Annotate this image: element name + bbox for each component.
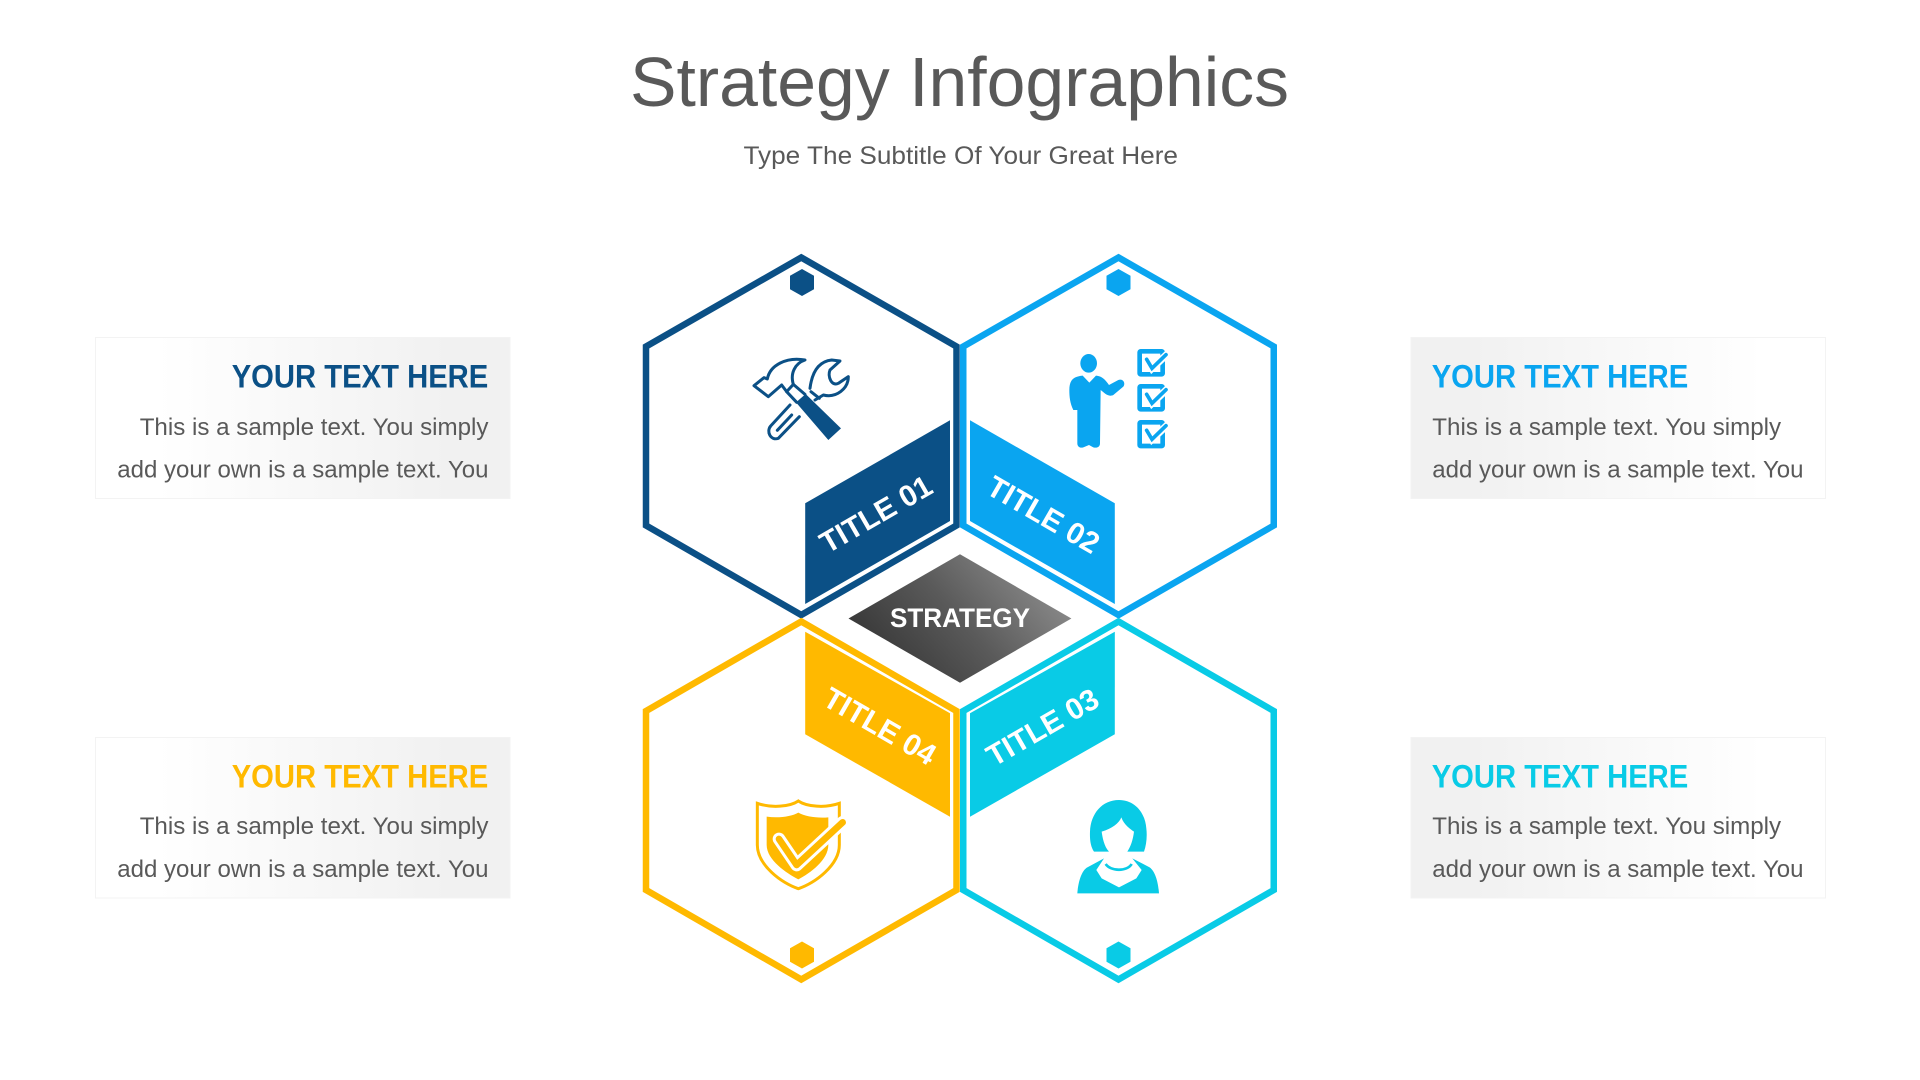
panel: text card top right	[1411, 338, 1826, 498]
title banner 04	[805, 632, 950, 817]
card body line 1: This is a sample text. You simply	[140, 414, 489, 441]
card body line 2: add your own is a sample text. You	[117, 856, 489, 883]
panel: text card bottom left	[96, 738, 510, 898]
card heading: YOUR TEXT HERE	[232, 359, 488, 395]
title banner 03	[970, 632, 1115, 817]
hexagon marker 03	[1106, 942, 1130, 968]
icon: shield with check	[757, 801, 843, 889]
hexagon marker 01	[790, 269, 814, 296]
icon: presenter with checklist	[1069, 351, 1167, 448]
card body line 1: This is a sample text. You simply	[1432, 414, 1782, 441]
card heading: YOUR TEXT HERE	[232, 758, 488, 794]
panel: hexagon 02	[963, 258, 1274, 615]
hexagon marker 04	[790, 942, 814, 968]
banner label 03: TITLE 03	[981, 683, 1105, 773]
card body line 2: add your own is a sample text. You	[1432, 456, 1804, 484]
panel: text card top left	[96, 338, 510, 498]
banner label 01: TITLE 01	[814, 470, 938, 560]
title: Strategy Infographics	[630, 43, 1289, 121]
subtitle: Type The Subtitle Of Your Great Here	[744, 142, 1178, 170]
card body line 2: add your own is a sample text. You	[1432, 856, 1804, 883]
card body line 2: add your own is a sample text. You	[117, 456, 489, 484]
card heading: YOUR TEXT HERE	[1432, 359, 1688, 395]
center diamond: strategy	[848, 554, 1071, 683]
card body line 1: This is a sample text. You simply	[1432, 813, 1782, 840]
panel: hexagon 01	[646, 258, 956, 615]
card heading: YOUR TEXT HERE	[1432, 758, 1688, 794]
hexagon marker 02	[1106, 269, 1130, 296]
icon: hammer and wrench	[754, 359, 848, 440]
title banner 02	[970, 420, 1115, 604]
panel: text card bottom right	[1411, 738, 1826, 898]
diamond label: STRATEGY	[890, 603, 1030, 633]
banner label 02: TITLE 02	[981, 470, 1105, 561]
card body line 1: This is a sample text. You simply	[140, 813, 489, 840]
title banner 01	[805, 420, 950, 604]
panel: hexagon 03	[963, 622, 1274, 980]
icon: businesswoman	[1077, 800, 1159, 893]
panel: hexagon 04	[646, 622, 956, 980]
banner label 04: TITLE 04	[818, 682, 942, 772]
